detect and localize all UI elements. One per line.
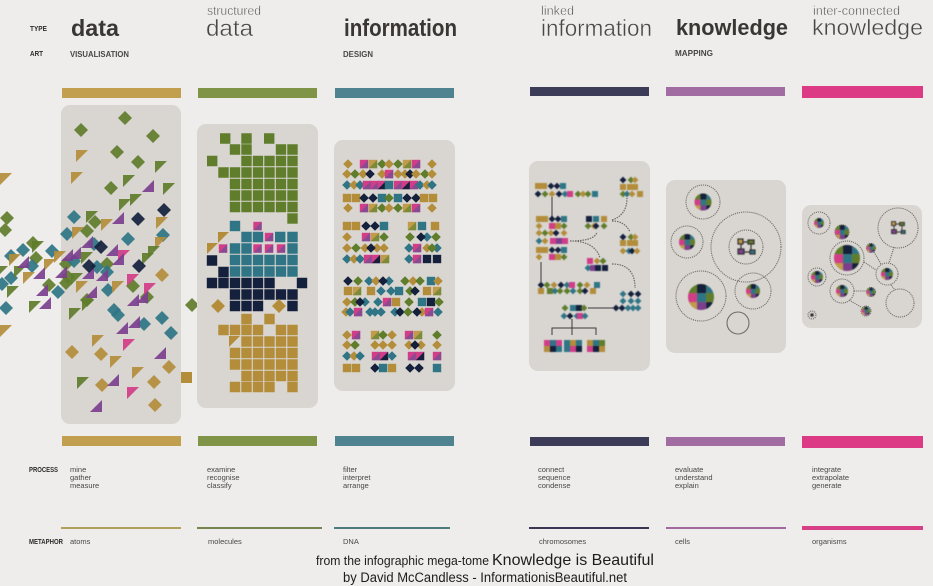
heading: inter-connected knowledge: knowledge xyxy=(812,15,923,40)
process lists: mine xyxy=(70,465,86,474)
metaphor labels: cells xyxy=(675,537,690,546)
row labels xyxy=(29,26,63,546)
art labels: DESIGN xyxy=(343,49,373,59)
network circles xyxy=(808,208,918,319)
metaphor labels: molecules xyxy=(208,537,242,546)
process lists: evaluate xyxy=(675,465,703,474)
footer credit: from the infographic mega-tome xyxy=(316,554,489,568)
process lists: examine xyxy=(207,465,235,474)
network links xyxy=(849,247,895,307)
panel: knowledge xyxy=(666,180,786,353)
pattern block 4 xyxy=(342,330,442,373)
heading: linked information xyxy=(541,3,652,41)
process lists: interpret xyxy=(343,473,371,482)
gold square xyxy=(181,372,192,383)
process lists xyxy=(70,465,849,490)
process lists: condense xyxy=(538,481,571,490)
heading: linked information: linked xyxy=(541,3,574,18)
process lists: explain xyxy=(675,481,699,490)
pattern block 1 xyxy=(342,159,437,213)
linked pattern clusters xyxy=(535,177,643,319)
heading: structured data: structured xyxy=(207,3,261,18)
process lists: integrate xyxy=(812,465,841,474)
metaphor labels: chromosomes xyxy=(539,537,586,546)
panel: information xyxy=(334,140,455,391)
process lists: sequence xyxy=(538,473,571,482)
metaphor labels: atoms xyxy=(70,537,91,546)
art labels xyxy=(70,48,713,59)
panel: inter-connected knowledge xyxy=(802,205,922,328)
pattern block 2 xyxy=(342,221,442,264)
heading: knowledge: knowledge xyxy=(676,15,788,40)
heading: data: data xyxy=(71,15,119,41)
process lists: classify xyxy=(207,481,232,490)
process lists: gather xyxy=(70,473,92,482)
process lists: generate xyxy=(812,481,842,490)
metaphor labels: organisms xyxy=(812,537,847,546)
panel: linked information xyxy=(529,161,650,371)
column headings xyxy=(70,3,923,59)
process lists: understand xyxy=(675,473,713,482)
process lists: extrapolate xyxy=(812,473,849,482)
heading: inter-connected knowledge xyxy=(812,3,923,40)
row labels: TYPE xyxy=(30,26,47,33)
top colour bars xyxy=(62,86,923,98)
row labels: PROCESS xyxy=(29,467,58,474)
art labels: MAPPING xyxy=(675,48,713,58)
bottom colour bars xyxy=(62,436,923,448)
metaphor labels: DNA xyxy=(343,537,359,546)
metaphor labels xyxy=(70,537,847,546)
connector lines xyxy=(541,197,613,335)
art labels: VISUALISATION xyxy=(70,49,129,59)
process lists: measure xyxy=(70,481,99,490)
gold block xyxy=(211,299,298,387)
navy block xyxy=(207,260,307,306)
empty circle xyxy=(727,312,749,334)
chromosome blocks xyxy=(544,340,605,352)
green block xyxy=(207,138,298,218)
panel: data xyxy=(0,105,199,424)
footer credit: by David McCandless - InformationisBeautiful.net xyxy=(343,570,627,585)
footer credit xyxy=(316,552,654,585)
pattern block 3 xyxy=(341,276,444,317)
dotted links xyxy=(570,198,635,288)
teal block xyxy=(207,222,298,272)
heading: inter-connected knowledge: inter-connected xyxy=(813,3,900,18)
process lists: recognise xyxy=(207,473,240,482)
process lists: filter xyxy=(343,465,358,474)
heading: information: information xyxy=(344,15,457,42)
network mosaics xyxy=(810,218,905,317)
panel: structured data xyxy=(197,124,318,408)
row labels: ART xyxy=(30,51,44,58)
footer credit: Knowledge is Beautiful xyxy=(492,552,654,569)
row labels: METAPHOR xyxy=(29,539,63,546)
knowledge mosaics xyxy=(679,194,761,311)
scattered data points xyxy=(0,111,199,412)
heading: structured data: data xyxy=(206,15,253,41)
heading: linked information: information xyxy=(541,15,652,41)
heading: structured data xyxy=(206,3,261,41)
metaphor rules xyxy=(61,526,923,530)
process lists: arrange xyxy=(343,481,369,490)
process lists: connect xyxy=(538,465,565,474)
dotted knowledge circles xyxy=(671,185,781,321)
